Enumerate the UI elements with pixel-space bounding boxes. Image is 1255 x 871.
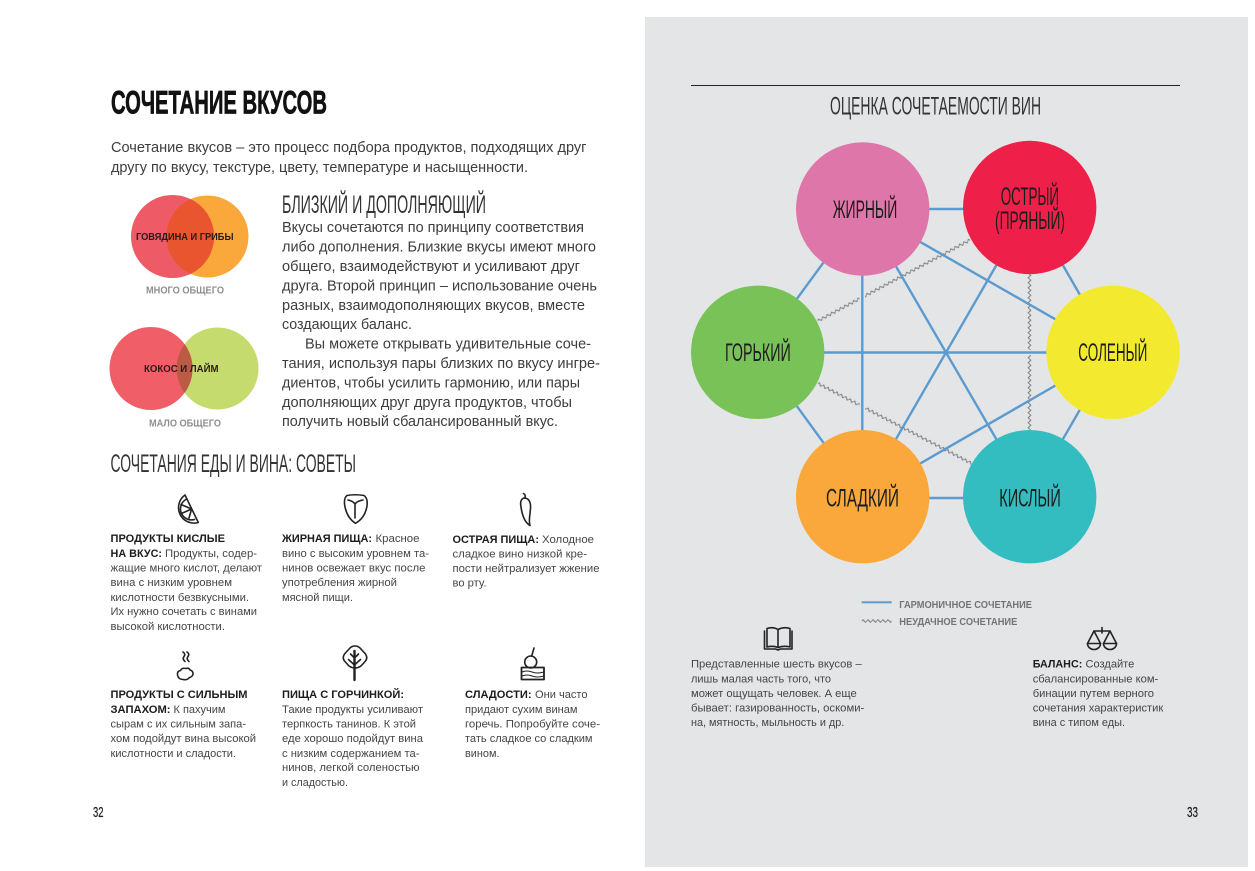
tip: fatty food: Красное bbox=[376, 533, 420, 545]
body text: Вы можете открывать удивительные соче- bbox=[305, 336, 591, 352]
tip: strong smelling foods: хом подойдут вина высокой bbox=[110, 733, 256, 745]
chart heading: ОЦЕНКА СОЧЕТАЕМОСТИ ВИН bbox=[830, 92, 1041, 120]
heading: food and wine tips: СОЧЕТАНИЯ ЕДЫ И ВИНА: СОВЕТЫ bbox=[110, 450, 356, 478]
flavour wheel chart bbox=[691, 141, 1180, 563]
body text bbox=[282, 220, 600, 430]
tip: strong smelling foods: сырам с их сильным запа- bbox=[110, 718, 246, 730]
tip: sweets: горечь. Попробуйте соче- bbox=[465, 718, 600, 730]
node: spicy: (ПРЯНЫЙ) bbox=[995, 205, 1065, 235]
note: balance: БАЛАНС: bbox=[1033, 658, 1082, 670]
panel: left page bbox=[93, 84, 600, 821]
note: balance: вина с типом еды. bbox=[1033, 717, 1125, 729]
venn diagram: many in common: ГОВЯДИНА И ГРИБЫ bbox=[136, 231, 234, 243]
heading: close and complementary: БЛИЗКИЙ И ДОПОЛНЯЮЩИЙ bbox=[282, 189, 486, 219]
tip: sweets: Они часто bbox=[535, 689, 588, 701]
node: bitter: ГОРЬКИЙ bbox=[725, 337, 791, 367]
tip: fatty food: ЖИРНАЯ ПИЩА: bbox=[281, 533, 372, 545]
node: fatty: ЖИРНЫЙ bbox=[833, 194, 897, 224]
tip: bitter food: с низким содержанием та- bbox=[282, 748, 420, 760]
note: balance: сбалансированные ком- bbox=[1033, 673, 1159, 685]
note: balance bbox=[1033, 658, 1163, 729]
harmonious pairing lines bbox=[758, 208, 1113, 498]
icon: scales bbox=[1088, 628, 1116, 650]
tip: strong smelling foods: ПРОДУКТЫ С СИЛЬНЫМ bbox=[110, 689, 248, 701]
venn diagram: little in common: МАЛО ОБЩЕГО bbox=[149, 418, 221, 430]
icon: chili pepper bbox=[521, 494, 531, 526]
tip: sweets: придают сухим винам bbox=[465, 704, 578, 716]
body text: разных, взаимодополняющих вкусов, вместе bbox=[282, 298, 585, 314]
intro text: Сочетание вкусов – это процесс подбора продуктов, подходящих друг bbox=[111, 140, 586, 156]
tip: sour foods: Продукты, содер- bbox=[165, 548, 257, 560]
tip: bitter food: Такие продукты усиливают bbox=[282, 704, 423, 716]
icon: steak bbox=[344, 495, 367, 523]
legend: ГАРМОНИЧНОЕ СОЧЕТАНИЕ bbox=[899, 600, 1032, 611]
tip: fatty food: вино с высоким уровнем та- bbox=[282, 548, 429, 560]
body text: диентов, чтобы усилить гармонию, или пары bbox=[282, 376, 580, 392]
tip: strong smelling foods: К пахучим bbox=[174, 704, 226, 716]
node: salty: СОЛЕНЫЙ bbox=[1078, 337, 1147, 367]
tip: sour foods: вина с низким уровнем bbox=[110, 577, 232, 589]
note: six tastes: лишь малая часть того, что bbox=[691, 673, 831, 685]
tip: sour foods: НА ВКУС: bbox=[110, 548, 162, 560]
icon: strong smell bbox=[177, 652, 193, 680]
node: sour: КИСЛЫЙ bbox=[999, 482, 1061, 512]
tip: bitter food: терпкость танинов. К этой bbox=[282, 718, 416, 730]
tip: strong smelling foods bbox=[110, 689, 256, 760]
tip: spicy food bbox=[452, 534, 600, 590]
intro text: другу по вкусу, текстуре, цвету, температуре и насыщенности. bbox=[111, 160, 528, 176]
venn diagram: many in common bbox=[131, 195, 248, 296]
node: sweet bbox=[796, 430, 929, 563]
tip: spicy food: сладкое вино низкой кре- bbox=[452, 548, 587, 560]
node: spicy: ОСТРЫЙ bbox=[1001, 181, 1059, 211]
legend: НЕУДАЧНОЕ СОЧЕТАНИЕ bbox=[899, 617, 1018, 628]
tip: sour foods: ПРОДУКТЫ КИСЛЫЕ bbox=[110, 533, 226, 545]
body text: либо дополнения. Близкие вкусы имеют много bbox=[282, 240, 596, 256]
node: sweet: СЛАДКИЙ bbox=[826, 482, 899, 512]
node: sour bbox=[963, 430, 1096, 563]
icon: open book bbox=[764, 628, 792, 650]
tip: spicy food: во рту. bbox=[452, 578, 486, 590]
panel: right page bbox=[645, 17, 1248, 867]
legend bbox=[862, 600, 1032, 628]
tip: sour foods: жащие много кислот, делают bbox=[110, 562, 262, 574]
tip: spicy food: пости нейтрализует жжение bbox=[452, 563, 600, 575]
node: spicy bbox=[963, 141, 1096, 274]
poor pairing lines bbox=[817, 238, 1032, 465]
note: balance: Создайте bbox=[1086, 658, 1134, 670]
venn diagram: little in common: КОКОС И ЛАЙМ bbox=[144, 362, 219, 375]
node: bitter bbox=[691, 286, 824, 419]
body text: друга. Второй принцип – использование очень bbox=[282, 278, 597, 294]
tip: spicy food: ОСТРАЯ ПИЩА: bbox=[452, 534, 539, 546]
note: six tastes: Представленные шесть вкусов – bbox=[691, 658, 862, 670]
venn diagram: little in common bbox=[110, 327, 258, 430]
note: balance: сочетания характеристик bbox=[1033, 702, 1163, 714]
tip: sour foods: кислотности безвкусными. bbox=[110, 592, 249, 604]
tip: bitter food bbox=[282, 688, 424, 789]
icon: tree leaf bbox=[343, 646, 367, 680]
tip: sour foods: высокой кислотности. bbox=[110, 621, 225, 633]
page number 32: 32 bbox=[93, 804, 104, 821]
page number 33: 33 bbox=[1187, 804, 1198, 821]
title: СОЧЕТАНИЕ ВКУСОВ bbox=[111, 84, 327, 120]
tip: strong smelling foods: ЗАПАХОМ: bbox=[110, 704, 170, 716]
tip: sour foods: Их нужно сочетать с винами bbox=[110, 606, 257, 618]
note: six tastes bbox=[691, 658, 865, 729]
tip: fatty food bbox=[281, 533, 429, 604]
note: six tastes: может ощущать человек. А еще bbox=[691, 688, 857, 700]
tip: fatty food: употребления жирной bbox=[282, 577, 397, 589]
top rule bbox=[691, 85, 1180, 86]
note: six tastes: на, мятность, мыльность и др. bbox=[691, 717, 844, 729]
tip: spicy food: Холодное bbox=[542, 534, 594, 546]
note: balance: бинации путем верного bbox=[1033, 688, 1154, 700]
tip: bitter food: ПИЩА С ГОРЧИНКОЙ: bbox=[282, 688, 404, 701]
tip: sweets: СЛАДОСТИ: bbox=[465, 689, 532, 701]
body text: дополняющих друг друга продуктов, чтобы bbox=[282, 395, 572, 411]
tip: fatty food: нинов освежает вкус после bbox=[282, 562, 426, 574]
body text: получить новый сбалансированный вкус. bbox=[282, 414, 558, 430]
note: six tastes: бывает: газированность, оскоми- bbox=[691, 702, 865, 714]
tip: bitter food: и сладостью. bbox=[282, 777, 348, 789]
body text: общего, взаимодействуют и усиливают друг bbox=[282, 259, 580, 275]
icon: cake with cherry bbox=[522, 648, 544, 680]
node: salty bbox=[1046, 286, 1180, 419]
venn diagram: many in common: МНОГО ОБЩЕГО bbox=[146, 286, 224, 296]
tip: sweets bbox=[465, 689, 600, 760]
tip: bitter food: еде хорошо подойдут вина bbox=[282, 733, 424, 745]
tip: fatty food: мясной пищи. bbox=[282, 592, 353, 604]
intro text bbox=[111, 140, 586, 176]
tip: sweets: тать сладкое со сладким bbox=[465, 733, 592, 745]
body text: создающих баланс. bbox=[282, 317, 412, 333]
icon: lemon wedge bbox=[179, 495, 198, 523]
tip: sweets: вином. bbox=[465, 748, 500, 760]
body text: тания, используя пары близких по вкусу ингре- bbox=[282, 356, 600, 372]
tip: sour foods bbox=[110, 533, 262, 633]
node: fatty bbox=[796, 142, 929, 276]
tip: bitter food: нинов, легкой соленостью bbox=[282, 762, 420, 774]
body text: Вкусы сочетаются по принципу соответствия bbox=[282, 220, 584, 236]
tip: strong smelling foods: кислотности и сладости. bbox=[110, 748, 236, 760]
